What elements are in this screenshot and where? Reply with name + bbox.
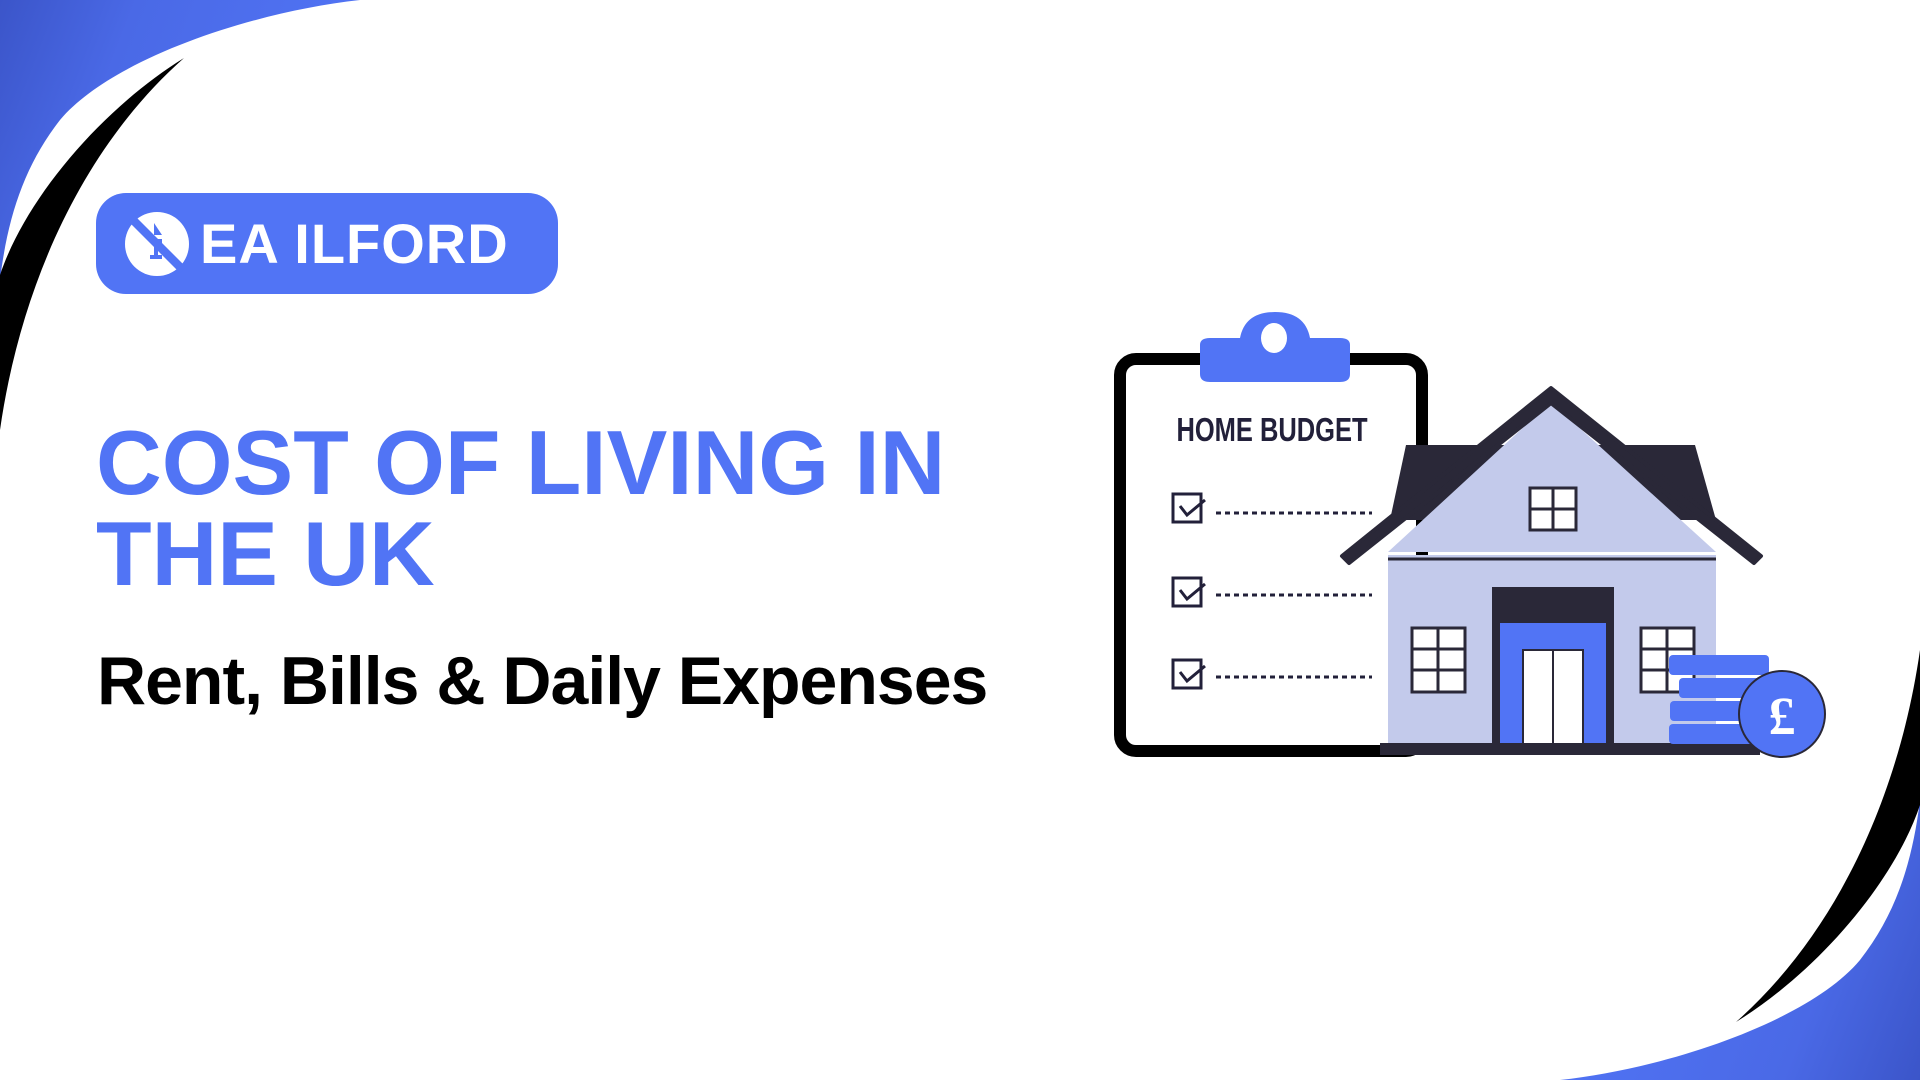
house bbox=[1342, 388, 1761, 755]
clipboard bbox=[1120, 312, 1422, 751]
illustration: home budget clipboard and house bbox=[1114, 312, 1826, 758]
logo text: EA ILFORD bbox=[200, 212, 509, 275]
subtitle: Rent, Bills & Daily Expenses bbox=[97, 643, 987, 719]
coins and pound: £ bbox=[1768, 686, 1796, 746]
logo pill: EA ILFORD bbox=[96, 193, 558, 294]
clipboard: HOME BUDGET bbox=[1176, 412, 1368, 449]
coins and pound bbox=[1669, 655, 1825, 757]
icon: logo mark bbox=[125, 212, 189, 276]
title: COST OF LIVING IN bbox=[96, 413, 945, 514]
title: THE UK bbox=[96, 504, 435, 605]
title bbox=[96, 413, 945, 605]
